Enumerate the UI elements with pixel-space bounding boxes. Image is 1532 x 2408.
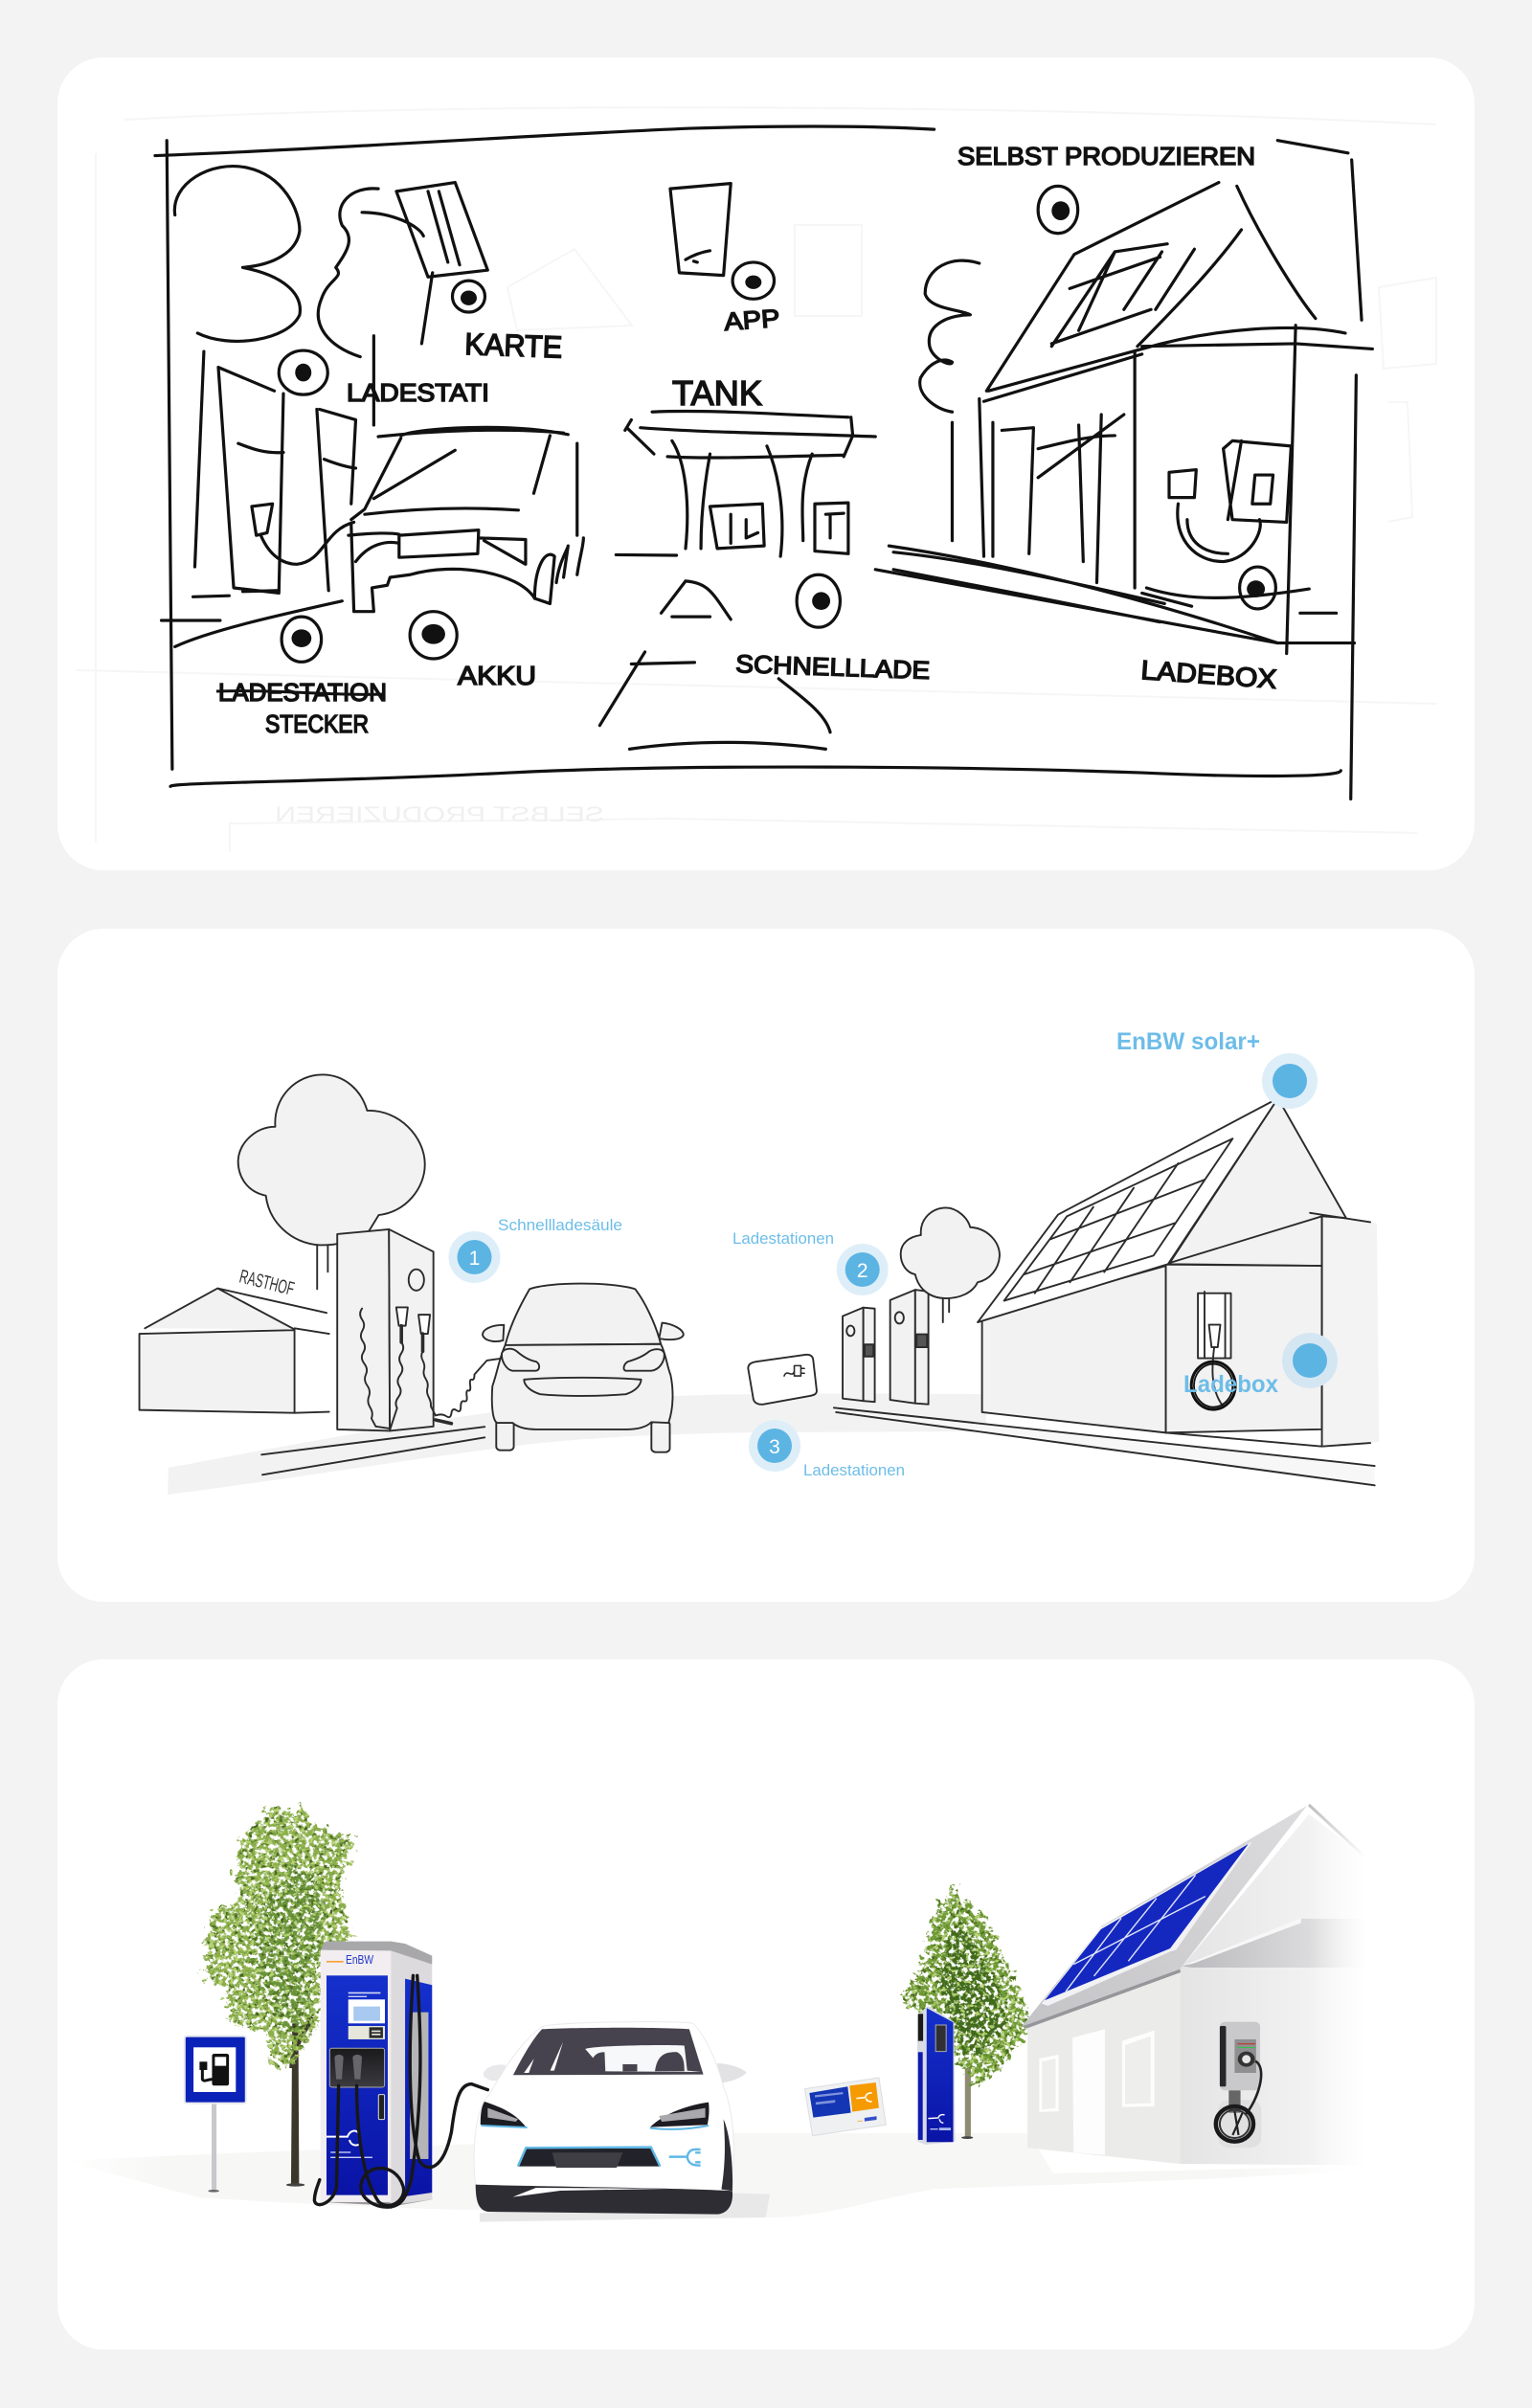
label: Ladestationen bottom: Ladestationen xyxy=(803,1461,905,1479)
hotspot wallbox xyxy=(1282,1333,1338,1388)
small charger xyxy=(843,1308,875,1402)
road edge xyxy=(261,1427,484,1474)
label: Schnellladesäule: Schnellladesäule xyxy=(498,1216,622,1234)
sketch house xyxy=(983,183,1372,401)
house fade-out xyxy=(1309,1800,1375,2183)
sketch card xyxy=(362,183,487,277)
wallbox xyxy=(1191,1292,1235,1409)
hotspot 3: 3 xyxy=(769,1436,780,1458)
house roof xyxy=(1022,1805,1367,2028)
sketch label: Tank: TANK xyxy=(672,373,762,413)
label: EnBW solar+: EnBW solar+ xyxy=(1116,1028,1260,1055)
tree xyxy=(206,1807,354,2187)
road strip xyxy=(834,1407,1375,1485)
ground xyxy=(61,2133,1369,2217)
fast charger xyxy=(337,1229,436,1430)
sketch hotspots xyxy=(452,281,484,312)
panel: hand-drawn sketch xyxy=(57,57,1475,870)
sketch label: Schnelllade: SCHNELLLADE xyxy=(735,649,931,685)
sketch charging station xyxy=(194,351,355,593)
line art: rest stop, charger and car xyxy=(140,1074,684,1474)
sketch petrol station xyxy=(625,411,875,458)
hotspot 3 xyxy=(749,1420,800,1472)
house xyxy=(978,1089,1370,1447)
sketch car xyxy=(351,427,577,535)
wallbox with cable xyxy=(1216,2022,1261,2148)
sketch label: Selbst produzieren: SELBST PRODUZIEREN xyxy=(958,142,1255,170)
far wall tint xyxy=(1322,1216,1379,1447)
sketch drawing xyxy=(155,126,1372,799)
large charger xyxy=(890,1290,929,1405)
faint bleed-through of the paper xyxy=(77,107,1436,852)
hotspot 1 xyxy=(448,1231,500,1283)
fast charger xyxy=(321,1942,432,2206)
sketch label: Ladestation struck through: LADESTATION xyxy=(218,678,387,707)
faint bleed-through of the paper: SELBST PRODUZIEREN xyxy=(275,802,604,826)
hotspot 2: 2 xyxy=(857,1260,868,1282)
house walls xyxy=(1027,1814,1371,2166)
tree xyxy=(902,1883,1027,2139)
sketch wallbox xyxy=(1146,440,1309,597)
charging card xyxy=(748,1355,817,1405)
car xyxy=(474,2022,770,2222)
hotspot 1: 1 xyxy=(469,1248,480,1270)
sketch label: App: APP xyxy=(723,304,780,336)
illustration: sign, tree, charger and car xyxy=(185,1807,770,2222)
panel: coloured illustration xyxy=(57,1659,1475,2350)
rest stop building xyxy=(140,1289,329,1413)
wall charging station xyxy=(917,2006,956,2145)
label: Ladebox: Ladebox xyxy=(1183,1371,1278,1398)
charger brand text: EnBW xyxy=(346,1952,374,1967)
charger cables xyxy=(314,1975,487,2207)
tree xyxy=(238,1074,425,1289)
hotspot 2 xyxy=(837,1244,889,1295)
sketch label: Ladebox: LADEBOX xyxy=(1140,655,1278,694)
sketch trees xyxy=(174,167,300,341)
sketch label: Stecker: STECKER xyxy=(265,709,369,738)
sketch phone xyxy=(670,184,731,276)
hotspot solar xyxy=(1262,1053,1318,1109)
sketch label: Akku: AKKU xyxy=(458,661,536,690)
solar panels xyxy=(1004,1138,1232,1301)
sketch frame xyxy=(155,126,935,156)
illustration: card, station, tree and solar house xyxy=(804,1800,1375,2183)
sketch road xyxy=(599,581,830,749)
label: Ladestationen top: Ladestationen xyxy=(732,1229,834,1248)
sketch label: Karte: KARTE xyxy=(464,326,563,365)
line art: stations, card and house xyxy=(748,1089,1379,1485)
ground band xyxy=(168,1394,986,1495)
parking sign xyxy=(185,2037,246,2193)
label: Rasthof: RASTHOF xyxy=(237,1267,296,1300)
sketch label: Ladestation: LADESTATI xyxy=(347,378,489,407)
small tree xyxy=(901,1207,1000,1322)
house windows and door xyxy=(1039,2029,1155,2155)
charging cable xyxy=(436,1359,500,1417)
solar panels xyxy=(1042,1841,1252,2006)
panel: line drawing with hotspots xyxy=(57,929,1475,1602)
car xyxy=(483,1284,684,1452)
charging card xyxy=(804,2078,886,2136)
